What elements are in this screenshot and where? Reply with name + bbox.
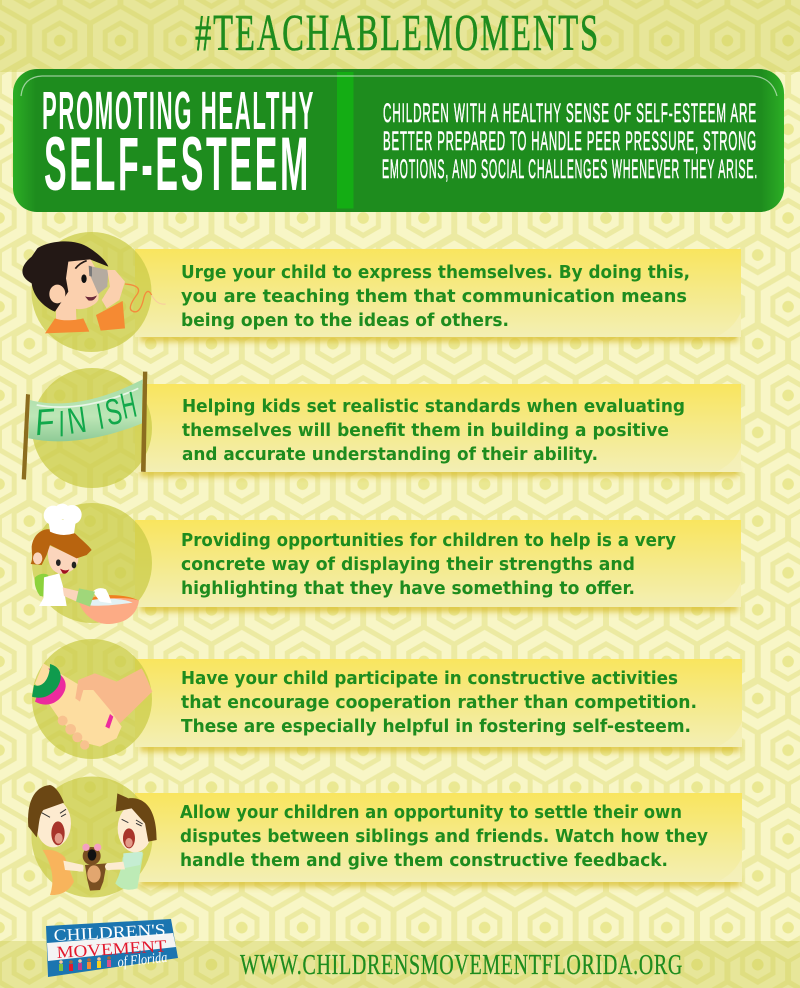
icon: finish banner (22, 372, 147, 480)
text block: intro (382, 98, 758, 184)
text block: tip 5 (180, 803, 709, 871)
bottom band (0, 941, 800, 988)
text block: tip 3 (181, 531, 677, 599)
text block: tip 1: being open to the ideas of others. (181, 311, 509, 331)
text block: tip 2 (182, 397, 685, 465)
panel: header: SELF-ESTEEM (44, 122, 311, 207)
icon: finish banner: I (94, 397, 107, 438)
text block: tip 1 (181, 263, 690, 331)
panel: tip 1 (22, 232, 741, 352)
top band (0, 0, 800, 72)
text block: tip 2: Helping kids set realistic standards when evaluating (182, 397, 685, 417)
logo: Children's Movement of Florida: CHILDREN'S (53, 920, 166, 945)
text block: tip 3: concrete way of displaying their strengths and (181, 555, 635, 575)
icon: finish banner: F (34, 402, 56, 444)
text block: tip 3: Providing opportunities for children to help is a very (181, 531, 677, 551)
panel: header: PROMOTING HEALTHY (42, 81, 315, 141)
icon: finish banner: S (101, 390, 126, 434)
icon: child chef baking (31, 504, 139, 624)
panel: tip 3 (31, 503, 741, 624)
text block: tip 2: themselves will benefit them in building a positive (182, 421, 669, 441)
text block: tip 5: handle them and give them constructive feedback. (180, 851, 668, 871)
text block: tip 5: Allow your children an opportunity to settle their own (180, 803, 682, 823)
panel: tip 4 (32, 639, 742, 759)
text block: tip 2: and accurate understanding of their ability. (182, 445, 598, 465)
text block: tip 4: These are especially helpful in fostering self-esteem. (181, 717, 691, 737)
logo: Children's Movement of Florida: MOVEMENT (56, 936, 168, 962)
text block: tip 4 (181, 669, 697, 737)
text block: tip 3: highlighting that they have something to offer. (181, 579, 635, 599)
icon: siblings arguing over teddy bear (28, 785, 157, 895)
icon: child with tin-can phone (22, 241, 166, 333)
panel: tip 5 (28, 776, 742, 898)
text block: tip 4: that encourage cooperation rather than competition. (181, 693, 697, 713)
text block: tip 1: Urge your child to express themselves. By doing this, (181, 263, 690, 283)
panel: header (13, 69, 784, 212)
panel: tip 2 (22, 368, 741, 488)
text block: tip 1: you are teaching them that communication means (181, 287, 687, 307)
icon: handshake (32, 663, 152, 750)
icon: finish banner: I (59, 404, 65, 445)
icon: finish banner: N (65, 398, 89, 442)
icon: finish banner: H (117, 384, 140, 427)
logo: Children's Movement of Florida (46, 919, 178, 977)
logo: Children's Movement of Florida: of Florida (117, 950, 168, 971)
text block: tip 5: disputes between siblings and friends. Watch how they (180, 827, 709, 847)
text block: tip 4: Have your child participate in constructive activities (181, 669, 678, 689)
